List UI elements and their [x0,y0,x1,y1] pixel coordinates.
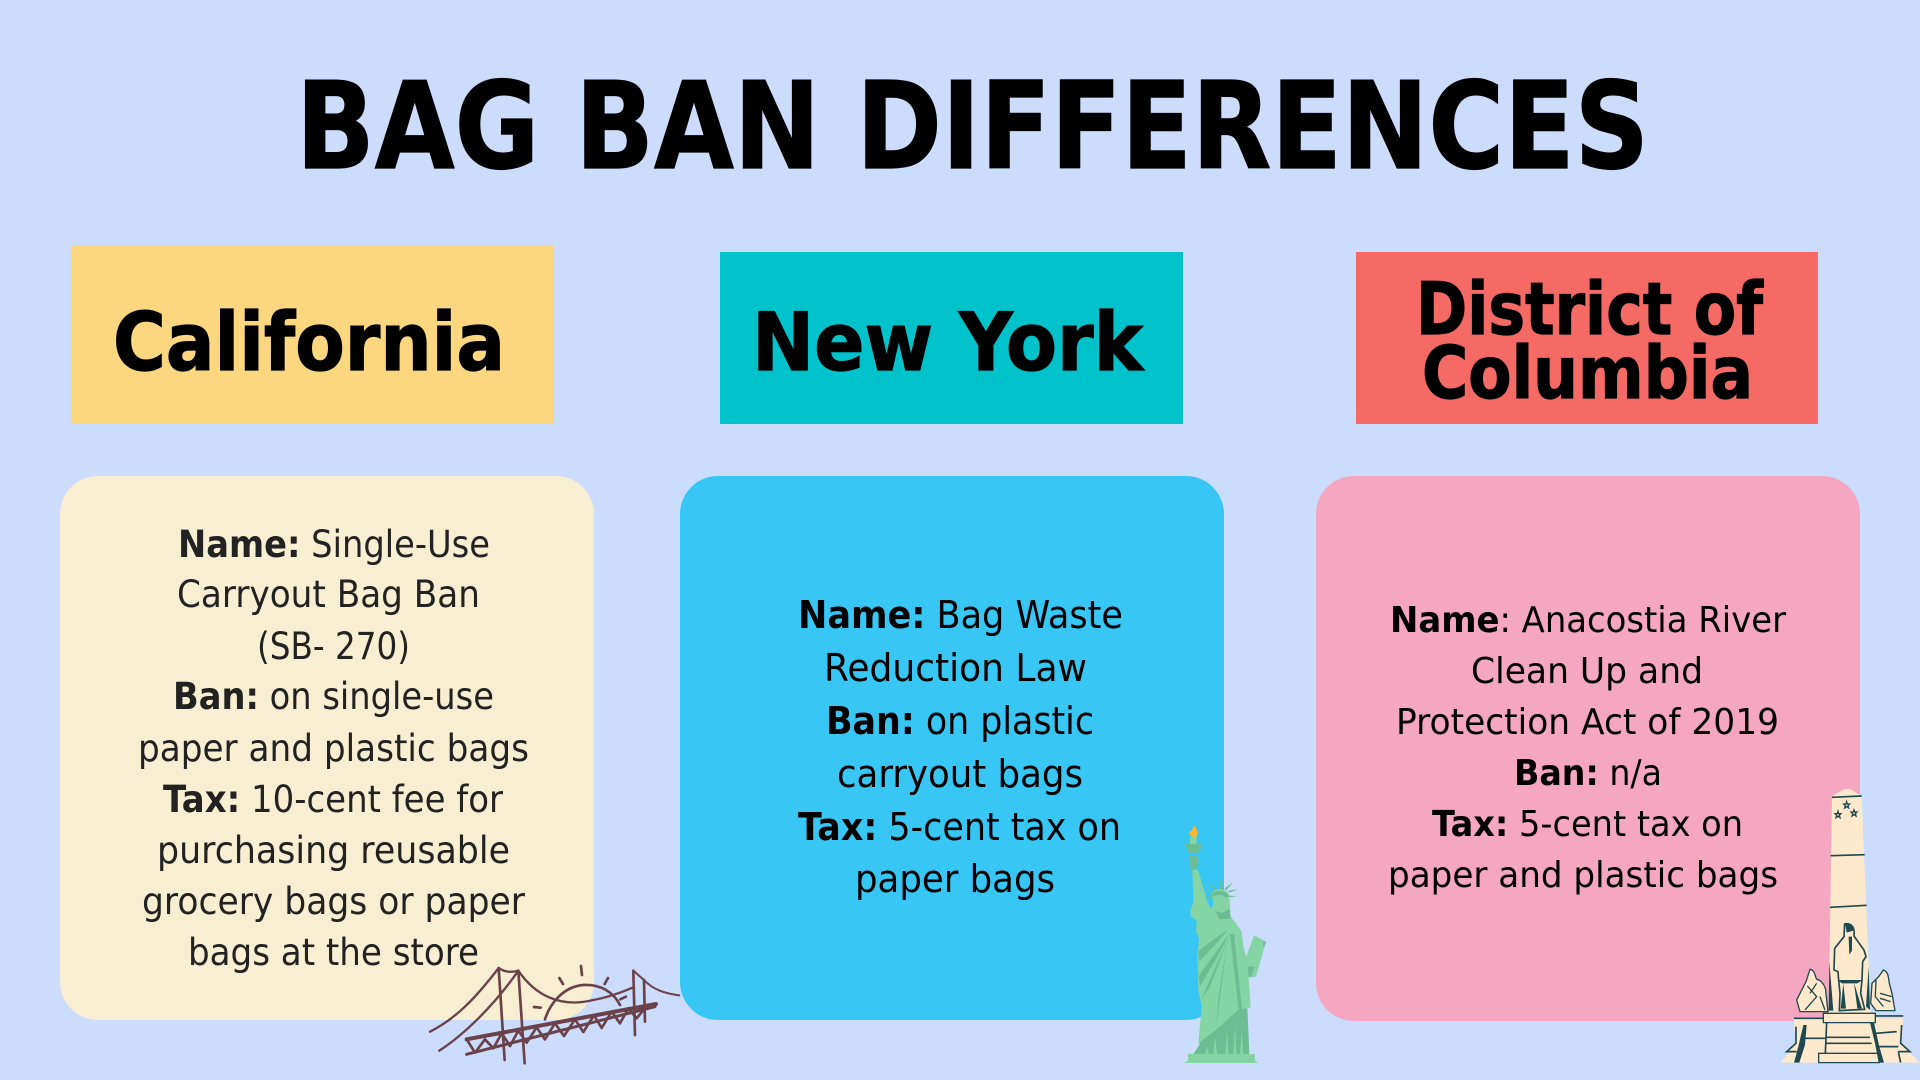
District of Columbia details card: Name: Anacostia River [1390,600,1786,641]
District of Columbia details card: Protection Act of 2019 [1396,702,1779,743]
title: BAG BAN DIFFERENCES [296,58,1649,197]
icon: Statue of Liberty [1184,825,1266,1063]
icon: monument [1781,789,1919,1063]
New York heading [720,252,1183,424]
California details card: grocery bags or paper [142,879,526,923]
District of Columbia details card: paper and plastic bags [1388,855,1778,896]
District of Columbia heading [1356,252,1818,424]
California heading [71,245,554,424]
New York details card: carryout bags [837,752,1083,796]
California heading: California [113,296,505,389]
District of Columbia details card: Tax: 5-cent tax on [1432,804,1743,845]
panel: California [60,245,594,1020]
New York details card: Tax: 5-cent tax on [798,805,1121,849]
panel: New York [680,252,1224,1020]
panel: District of Columbia [1316,252,1860,1021]
District of Columbia details card: Clean Up and [1471,651,1703,692]
California details card: bags at the store [188,930,479,974]
District of Columbia heading: District of [1416,267,1764,351]
California details card: Carryout Bag Ban [177,572,480,616]
New York details card: Name: Bag Waste [798,593,1123,637]
California details card: Tax: 10-cent fee for [163,777,504,821]
District of Columbia details card: Ban: n/a [1514,753,1662,794]
California details card [60,476,594,1020]
California details card: (SB- 270) [257,624,410,668]
New York details card: Ban: on plastic [826,699,1094,743]
icon: Golden Gate bridge [430,966,679,1063]
California details card: purchasing reusable [157,828,510,872]
New York heading: New York [752,296,1145,389]
California details card: Name: Single-Use [178,522,490,566]
District of Columbia details card [1316,476,1860,1021]
District of Columbia heading: Columbia [1422,331,1753,415]
California details card: paper and plastic bags [138,726,529,770]
New York details card: paper bags [855,857,1055,901]
New York details card: Reduction Law [824,646,1087,690]
California details card: Ban: on single-use [173,674,494,718]
New York details card [680,476,1224,1020]
